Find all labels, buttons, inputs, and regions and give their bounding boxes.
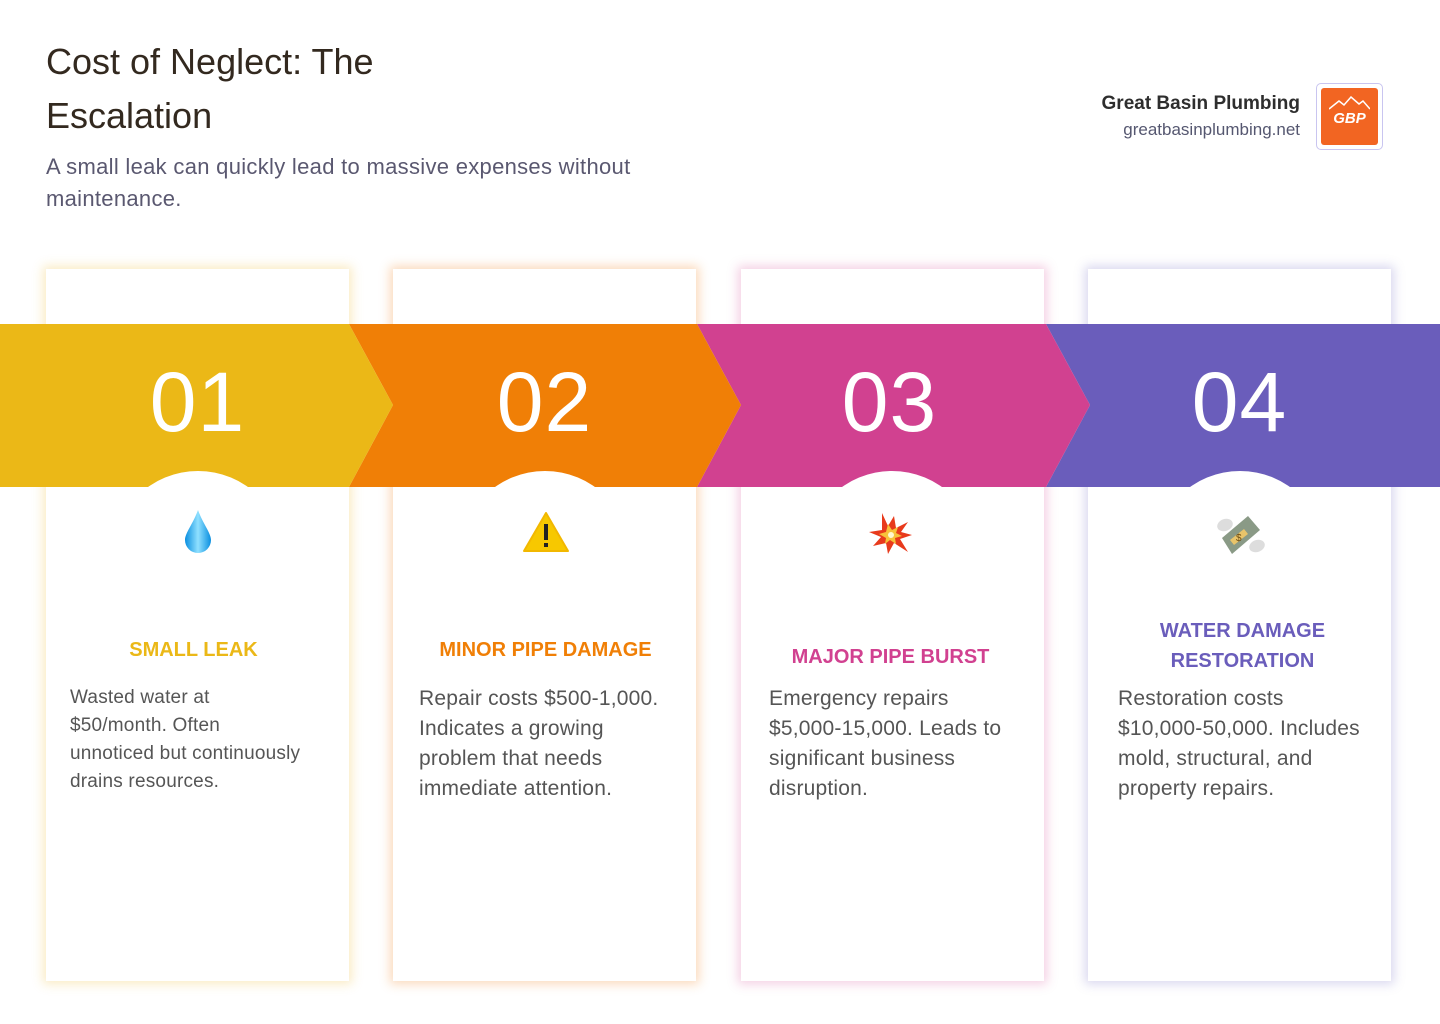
card 1 text: $50/month. Often (70, 715, 220, 736)
card 4 heading (1160, 620, 1325, 672)
card 3 text: significant business (769, 747, 955, 770)
card 3 (741, 269, 1044, 981)
icon: warning (523, 512, 569, 552)
card 4 text: $10,000-50,000. Includes (1118, 717, 1360, 740)
card 3 text: $5,000-15,000. Leads to (769, 717, 1001, 740)
icon: water drop (185, 510, 211, 553)
logo: GBP (1333, 110, 1366, 127)
card 1 text: drains resources. (70, 771, 219, 792)
card 2 text: problem that needs (419, 747, 602, 770)
icon: money with wings (1217, 516, 1265, 554)
card 3 text (769, 687, 1001, 800)
subtitle: maintenance. (46, 186, 182, 211)
logo (1316, 83, 1383, 150)
number 04: 04 (1192, 355, 1287, 449)
icon: money with wings: $ (1236, 533, 1242, 544)
card 4 text: property repairs. (1118, 777, 1274, 800)
title: Escalation (46, 95, 212, 136)
number 03: 03 (842, 355, 937, 449)
card 4 (1088, 269, 1391, 981)
card 4 text: mold, structural, and (1118, 747, 1312, 770)
brand name: Great Basin Plumbing (1102, 93, 1300, 114)
card 2 text (419, 687, 658, 800)
card 1 (46, 269, 349, 981)
card 3 text: disruption. (769, 777, 868, 800)
subtitle: A small leak can quickly lead to massive expenses without (46, 154, 630, 179)
card 2 heading: MINOR PIPE DAMAGE (439, 639, 652, 661)
card 1 text (70, 687, 300, 792)
card 2 text: immediate attention. (419, 777, 612, 800)
card 1 text: unnoticed but continuously (70, 743, 300, 764)
card 2 text: Indicates a growing (419, 717, 604, 740)
card 1 heading: SMALL LEAK (129, 639, 258, 661)
card 3 text: Emergency repairs (769, 687, 949, 710)
card 4 heading: WATER DAMAGE (1160, 620, 1325, 642)
card 4 heading: RESTORATION (1171, 650, 1314, 672)
number 02: 02 (497, 355, 592, 449)
title (46, 41, 374, 136)
card 3 heading: MAJOR PIPE BURST (792, 646, 989, 668)
brand url: greatbasinplumbing.net (1123, 120, 1300, 139)
arrow band (0, 324, 1440, 487)
card 2 (393, 269, 696, 981)
subtitle (46, 154, 630, 211)
brand block (1102, 83, 1383, 150)
card 2 text: Repair costs $500-1,000. (419, 687, 658, 710)
title: Cost of Neglect: The (46, 41, 374, 82)
card 1 text: Wasted water at (70, 687, 210, 708)
number 01: 01 (150, 355, 245, 449)
card 4 text (1118, 687, 1360, 800)
card 4 text: Restoration costs (1118, 687, 1284, 710)
icon: collision (869, 513, 912, 554)
